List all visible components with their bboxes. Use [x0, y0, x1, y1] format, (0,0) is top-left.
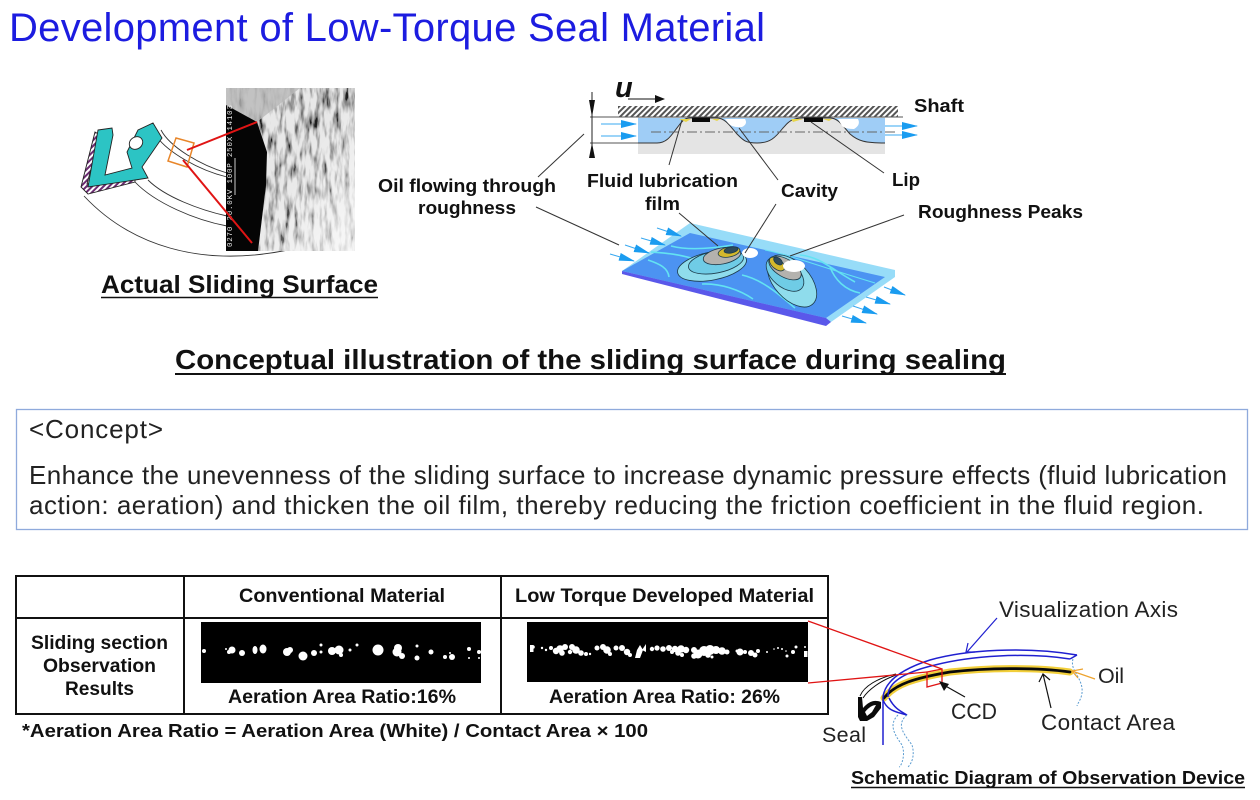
inflow and outflow arrows [610, 228, 905, 323]
roughness peak: left [675, 245, 758, 286]
fluid and lip profile [638, 117, 895, 154]
label: fluid lubrication film [587, 171, 738, 214]
seal silhouette [858, 674, 896, 721]
label: visualization axis: Visualization Axis [999, 597, 1178, 622]
column heading: low torque: Low Torque Developed Material [515, 586, 814, 607]
heading: actual sliding surface: Actual Sliding Surface [101, 271, 378, 299]
seal connecting arcs [84, 130, 288, 256]
contact area with oil [884, 669, 1070, 698]
heading: schematic diagram: Schematic Diagram of Observation Device [851, 768, 1245, 788]
label: fluid lubrication film: film [645, 194, 680, 214]
title: Development of Low-Torque Seal Material [9, 6, 765, 50]
leader lines for sliding surface labels [536, 120, 904, 256]
label: lip: Lip [892, 170, 920, 190]
label: fluid lubrication film: Fluid lubrication [587, 171, 738, 191]
shaft [618, 106, 898, 117]
photo: SEM sliding surface [226, 88, 355, 251]
heading: conceptual illustration: Conceptual illustration of the sliding surface during sealing [175, 344, 1006, 375]
label: CCD: CCD [951, 699, 997, 724]
diagram: observation device [808, 597, 1245, 788]
table: observation results [16, 576, 828, 714]
label: oil flowing through roughness: Oil flowing through [378, 176, 556, 196]
footnote: *Aeration Area Ratio = Aeration Area (White) / Contact Area × 100 [22, 721, 648, 741]
label: oil flowing through roughness: roughness [418, 198, 516, 218]
row heading: Observation [43, 656, 156, 677]
icon: seal cross-section [81, 123, 162, 194]
label: cavity: Cavity [781, 181, 838, 201]
label: oil flowing through roughness [378, 176, 556, 218]
label: contact area: Contact Area [1041, 710, 1175, 735]
visualization axis window [883, 650, 1077, 745]
slab [622, 223, 895, 322]
label: roughness peaks: Roughness Peaks [918, 202, 1083, 222]
arrow: contact area [1039, 674, 1051, 708]
diagram: rough surface perspective [610, 223, 905, 326]
concept body: Enhance the unevenness of the sliding surface to increase dynamic pressure effects (fluid lubrication [29, 460, 1227, 490]
row heading: Sliding section [31, 633, 168, 654]
flow arrows [601, 124, 917, 136]
panel: actual sliding surface [81, 88, 378, 299]
result: low torque: Aeration Area Ratio: 26% [549, 687, 780, 708]
flow streamlines [648, 245, 875, 308]
observation image: conventional [201, 622, 481, 683]
concept heading: <Concept> [29, 414, 163, 444]
gap dimension [589, 92, 903, 158]
velocity label [615, 72, 664, 104]
result: conventional: Aeration Area Ratio:16% [228, 687, 456, 708]
observation image: low torque [527, 622, 808, 682]
arrow: visualization axis [966, 618, 997, 652]
row heading: Results [65, 679, 134, 700]
velocity label: u [615, 72, 633, 104]
concept body: action: aeration) and thicken the oil film, thereby reducing the friction coefficient in the fluid region. [29, 490, 1204, 520]
red projection lines [808, 621, 942, 687]
diagram: lubrication cross-section [589, 72, 917, 158]
orange zoom box [168, 138, 194, 167]
panel: concept [16, 410, 1248, 530]
concept body [29, 460, 1227, 520]
label: seal: Seal [822, 723, 866, 747]
photo: SEM sliding surface: 0270 20.0KV 100P 250X 14103 [227, 105, 235, 247]
dotted outline [893, 659, 1082, 767]
row heading [31, 633, 168, 700]
label: shaft: Shaft [914, 96, 964, 116]
label: oil: Oil [1098, 664, 1124, 688]
column heading: conventional: Conventional Material [239, 586, 445, 607]
arrow: CCD [939, 681, 965, 697]
arrow: oil [1072, 669, 1095, 679]
red leader lines [183, 122, 257, 243]
roughness peak: right [758, 246, 826, 316]
